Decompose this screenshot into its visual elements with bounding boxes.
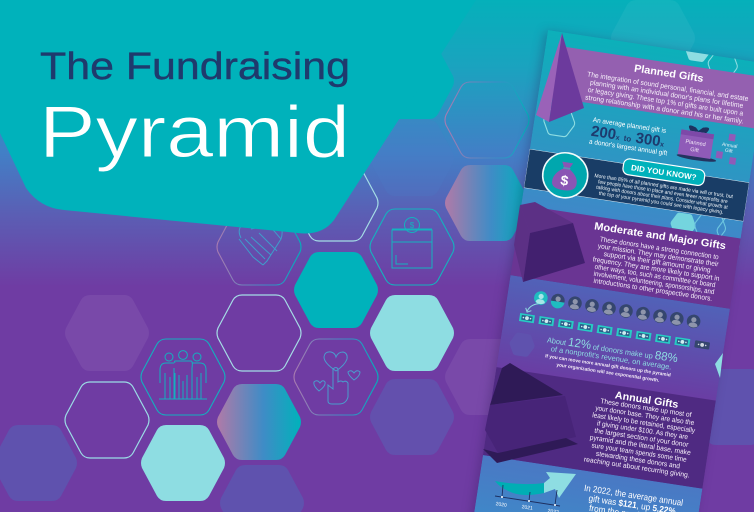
did you know text: More than 85% of all planned gifts are made via will or trust, but — [594, 173, 734, 200]
panel: annual gifts — [483, 367, 716, 489]
growth arrow chart: 2020 — [495, 501, 507, 509]
moderate gifts body text — [593, 236, 720, 301]
annual gifts body text: These donors make up most of — [600, 398, 692, 419]
heading: annual gifts: Annual Gifts — [614, 389, 679, 411]
did you know text: few people have those in place and even fewer nonprofits are — [598, 179, 728, 205]
icon: money bag — [542, 152, 588, 199]
hexagon icon: calendar with coin: $ — [410, 221, 415, 230]
icon: annual gift boxes: Annual — [721, 142, 738, 150]
annual gift statistic text: In 2022, the average annual — [583, 483, 684, 508]
planned gifts body text: or legacy giving. These top 1% of gifts are built upon a — [587, 87, 744, 118]
pyramid: annual tier — [483, 363, 578, 463]
donor statistic text: About 12% of donors make up 88% — [546, 332, 679, 365]
planned gifts body text: strong relationship with a donor and his or her family. — [585, 94, 744, 126]
did you know text: the top of your pyramid you could see with legacy giving. — [598, 191, 724, 216]
annual gifts body text: least likely to be retained, especially — [592, 412, 696, 435]
annual gifts body text: reaching out about recurring giving. — [583, 456, 690, 480]
donor icons row — [525, 291, 700, 328]
panel: did you know — [524, 148, 750, 222]
annual gifts body text — [583, 397, 699, 480]
did you know pill: DID YOU KNOW? — [630, 163, 697, 182]
planned gifts band — [552, 46, 754, 129]
title: The Fundraising — [40, 46, 350, 88]
donor statistic text: If you can move more annual gift donors up the pyramid — [545, 353, 671, 379]
moderate gifts body text: your mission. They may demonstrate their — [597, 243, 720, 269]
teal title panel — [0, 0, 476, 233]
panel: section backgrounds — [469, 30, 754, 512]
did you know text — [591, 173, 734, 217]
stat: planned gift multiple: 200x to 300x — [590, 123, 666, 151]
heading: planned gifts: Planned Gifts — [633, 63, 704, 85]
icon: planned gift box: Gift — [690, 147, 700, 154]
annual gifts body text: sure your team spends some time — [591, 442, 687, 464]
moderate gifts body text: other ways, too, such as committee or board — [594, 264, 716, 289]
growth arrow chart: 2021 — [521, 504, 533, 512]
title: Pyramid — [39, 92, 350, 173]
hexagon icon: handshake — [217, 209, 301, 285]
donor statistic text: of a nonprofit's revenue, on average. — [550, 344, 672, 371]
pyramid: moderate and major tier — [514, 202, 585, 282]
hexagon icon: hand and hearts — [294, 339, 378, 415]
panel: planned gifts — [546, 46, 754, 170]
icon: annual gift boxes: Gift — [724, 148, 734, 155]
heading: moderate and major gifts: Moderate and Major Gifts — [593, 220, 727, 252]
hexagon icon: people group — [141, 339, 225, 415]
moderate gifts body text: support via their gift amount or giving — [603, 251, 711, 274]
growth arrow chart — [495, 472, 576, 512]
pyramid: planned gifts tier — [536, 33, 584, 122]
money bills row — [519, 313, 710, 350]
annual gifts body text: your donor base. They are also the — [595, 405, 695, 427]
icon: planned gift box: Planned — [685, 139, 706, 148]
moderate gifts body text: introductions to other prospective donors. — [593, 278, 713, 303]
annual gifts body text: stewarding these donors and — [595, 451, 681, 470]
stat: planned gift multiple — [589, 117, 671, 157]
stat: planned gift multiple: An average planned gift is — [592, 117, 667, 135]
title — [39, 46, 350, 173]
icon: annual gift boxes — [716, 134, 738, 165]
stat: planned gift multiple: a donor's largest annual gift — [589, 139, 668, 157]
donor statistic text — [545, 338, 678, 382]
hexagon icon: calendar with coin — [370, 209, 454, 285]
donor statistic text: your organization will see exponential growth. — [556, 362, 660, 384]
annual gifts body text: if giving under $100. As they are — [596, 420, 689, 441]
did you know pill — [622, 158, 706, 186]
decorative accent shape — [715, 353, 723, 378]
icon: planned gift box — [676, 125, 716, 162]
moderate gifts body text: frequency. They are more likely to support in — [592, 256, 720, 283]
annual gifts body text: the largest section of your donor — [594, 428, 689, 449]
planned gifts body text: planning with an individual donor's plans for lifetime — [589, 80, 744, 110]
tilted infographic preview — [469, 16, 754, 512]
decorative hexes on the sheet — [510, 51, 744, 356]
icon: money bag: $ — [559, 172, 570, 189]
did you know text: talking with donors about their plans. Consider what growth at — [596, 185, 729, 211]
panel: moderate and major gifts — [510, 205, 741, 309]
moderate gifts body text: These donors have a strong connection to — [599, 236, 719, 261]
planned gifts body text — [583, 71, 749, 126]
planned gifts body text: The integration of sound personal, financial, and estate — [587, 71, 749, 103]
annual gifts body text: pyramid and the literal base, make — [589, 435, 691, 457]
moderate gifts body text: involvement, volunteering, sponsorships, and — [593, 271, 715, 296]
